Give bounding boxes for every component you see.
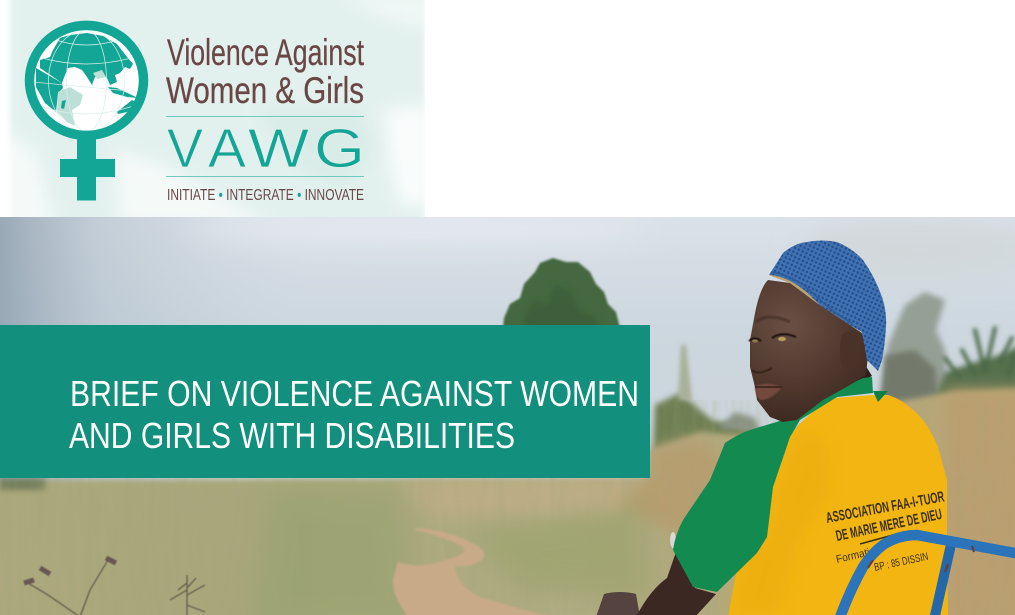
shirt line 1: ASSOCIATION FAA-I-TUOR: [825, 488, 946, 527]
VAWG wordmark: W: [248, 117, 309, 179]
shirt lettering: [825, 488, 946, 574]
banner panel: [0, 325, 650, 478]
shirt line 4: BP : 85 DISSIN: [873, 551, 929, 574]
title line 2: AND GIRLS WITH DISABILITIES: [69, 415, 515, 456]
field: [0, 388, 1015, 615]
VAWG wordmark: V: [167, 117, 203, 179]
VAWG wordmark: G: [314, 117, 365, 179]
foreground weeds: [24, 558, 205, 615]
shirt underline: [860, 535, 893, 544]
shirt shading: [726, 424, 799, 615]
photo: woman on a path: [0, 214, 1015, 615]
sky: [0, 214, 1015, 497]
woman's hand and arm: [596, 532, 716, 615]
woman's face: [750, 280, 868, 422]
background vegetation right: [652, 292, 1015, 480]
distant tree: [503, 258, 620, 328]
heading: Violence Against: Violence Against: [167, 32, 365, 73]
faded world map behind logo: [0, 0, 430, 230]
title banner: [0, 325, 650, 478]
woman's shirt, yellow back: [728, 395, 948, 615]
VAWG wordmark: A: [208, 117, 246, 179]
icon: globe inside female symbol: [30, 25, 144, 135]
logo block: [0, 0, 430, 230]
woman's blue knitted hat: [769, 240, 886, 371]
ear: [840, 332, 847, 350]
shirt line 2: DE MARIE MERE DE DIEU: [834, 506, 943, 545]
divider top: [166, 116, 364, 117]
woman's neck: [854, 367, 872, 382]
shirt line 3: Formati: [835, 547, 871, 566]
heading: Women and Girls: Women & Girls: [166, 70, 364, 111]
blue wheelchair frame: [839, 535, 1015, 615]
dirt path: [393, 528, 552, 615]
title line 1: BRIEF ON VIOLENCE AGAINST WOMEN: [70, 373, 639, 414]
facial features: [749, 317, 796, 400]
woman's shirt, green sleeve and collar: [673, 377, 873, 592]
collar back: [873, 391, 888, 402]
VAWG wordmark: [167, 117, 365, 179]
icon: female symbol cross: [60, 138, 115, 200]
divider bottom: [166, 176, 364, 177]
tagline: INITIATE • INTEGRATE • INNOVATE: [167, 187, 364, 204]
